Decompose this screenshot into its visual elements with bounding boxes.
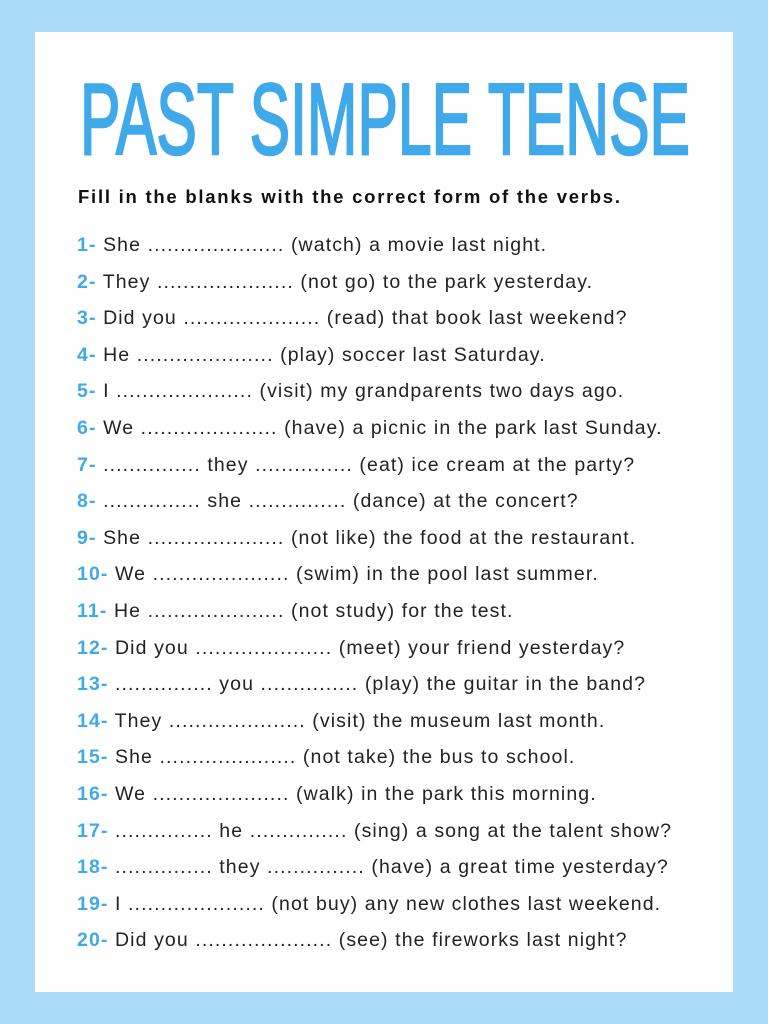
exercise list: 14- They ..................... (visit) the museum last month. — [77, 710, 605, 732]
exercise list: 7- ............... they ............... (eat) ice cream at the party? — [77, 454, 635, 476]
exercise list: 3- Did you ..................... (read) that book last weekend? — [77, 307, 628, 329]
exercise list: 8- ............... she ............... (dance) at the concert? — [77, 490, 579, 512]
exercise list: 19- I ..................... (not buy) any new clothes last weekend. — [77, 893, 661, 915]
exercise list: 15- She ..................... (not take) the bus to school. — [77, 746, 575, 768]
exercise list: 17- ............... he ............... (sing) a song at the talent show? — [77, 820, 672, 842]
exercise list: 5- I ..................... (visit) my grandparents two days ago. — [77, 380, 624, 402]
instructions: Fill in the blanks with the correct form of the verbs. — [78, 186, 622, 207]
exercise list: 11- He ..................... (not study) for the test. — [77, 600, 514, 622]
exercise list: 20- Did you ..................... (see) the fireworks last night? — [77, 929, 628, 951]
exercise list: 2- They ..................... (not go) to the park yesterday. — [77, 271, 593, 293]
exercise list — [77, 234, 672, 951]
exercise list: 9- She ..................... (not like) the food at the restaurant. — [77, 527, 636, 549]
exercise list: 12- Did you ..................... (meet) your friend yesterday? — [77, 637, 625, 659]
exercise list: 10- We ..................... (swim) in the pool last summer. — [77, 563, 599, 585]
exercise list: 6- We ..................... (have) a picnic in the park last Sunday. — [77, 417, 663, 439]
exercise list: 1- She ..................... (watch) a movie last night. — [77, 234, 547, 256]
exercise list: 13- ............... you ............... (play) the guitar in the band? — [77, 673, 646, 695]
exercise list: 18- ............... they ............... (have) a great time yesterday? — [77, 856, 669, 878]
exercise list: 4- He ..................... (play) soccer last Saturday. — [77, 344, 546, 366]
exercise list: 16- We ..................... (walk) in the park this morning. — [77, 783, 597, 805]
